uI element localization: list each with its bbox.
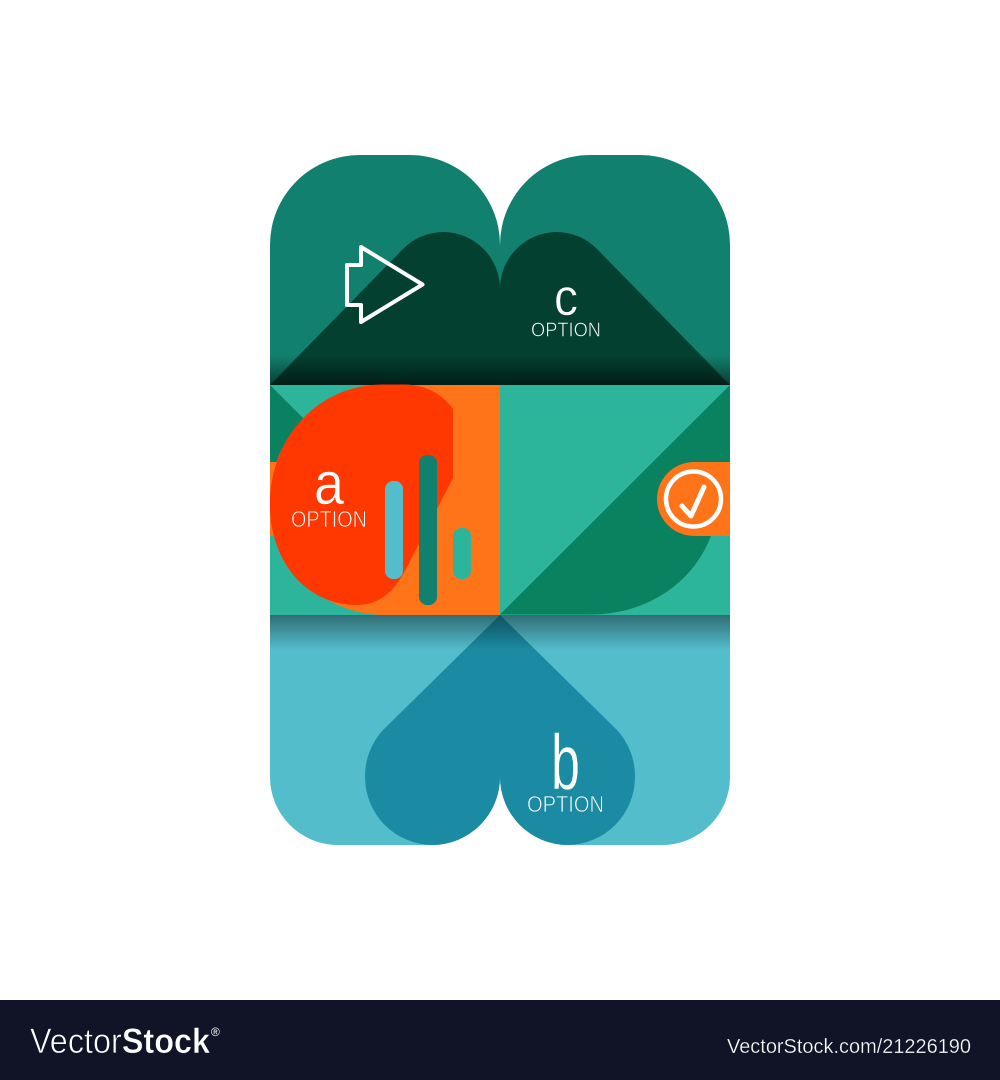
bottom panel: option b <box>270 615 730 845</box>
middle panel: option a and check <box>270 384 730 615</box>
left orange band <box>270 462 390 536</box>
letter c: c <box>554 269 578 327</box>
footer bar <box>0 1000 1000 1080</box>
letter a: a <box>314 450 345 517</box>
check icon <box>666 472 721 526</box>
red blob <box>270 384 453 605</box>
bottom panel background <box>270 615 730 845</box>
option c label: OPTION <box>531 318 601 342</box>
option a label: OPTION <box>291 506 367 532</box>
footer logo: VectorStock <box>30 1022 210 1061</box>
orange check pill <box>657 462 730 536</box>
orange drop shape <box>270 385 500 615</box>
registered mark: ® <box>211 1025 220 1039</box>
right dark green shape <box>500 385 730 614</box>
footer url: VectorStock.com/21226190 <box>727 1035 971 1058</box>
top panel shadow <box>270 355 730 385</box>
bar light teal <box>453 528 471 579</box>
bar blue <box>385 481 403 579</box>
arrow icon <box>347 247 422 322</box>
top panel: option c <box>270 155 730 385</box>
middle panel background <box>270 385 730 615</box>
top panel background lobes <box>270 155 730 385</box>
heart shape <box>365 615 635 845</box>
bar dark teal <box>419 455 437 605</box>
left dark green triangle <box>270 385 340 462</box>
dark mountain shape <box>270 232 730 385</box>
bottom panel shadow <box>270 615 730 650</box>
letter b: b <box>551 718 580 806</box>
option b label: OPTION <box>527 791 604 817</box>
